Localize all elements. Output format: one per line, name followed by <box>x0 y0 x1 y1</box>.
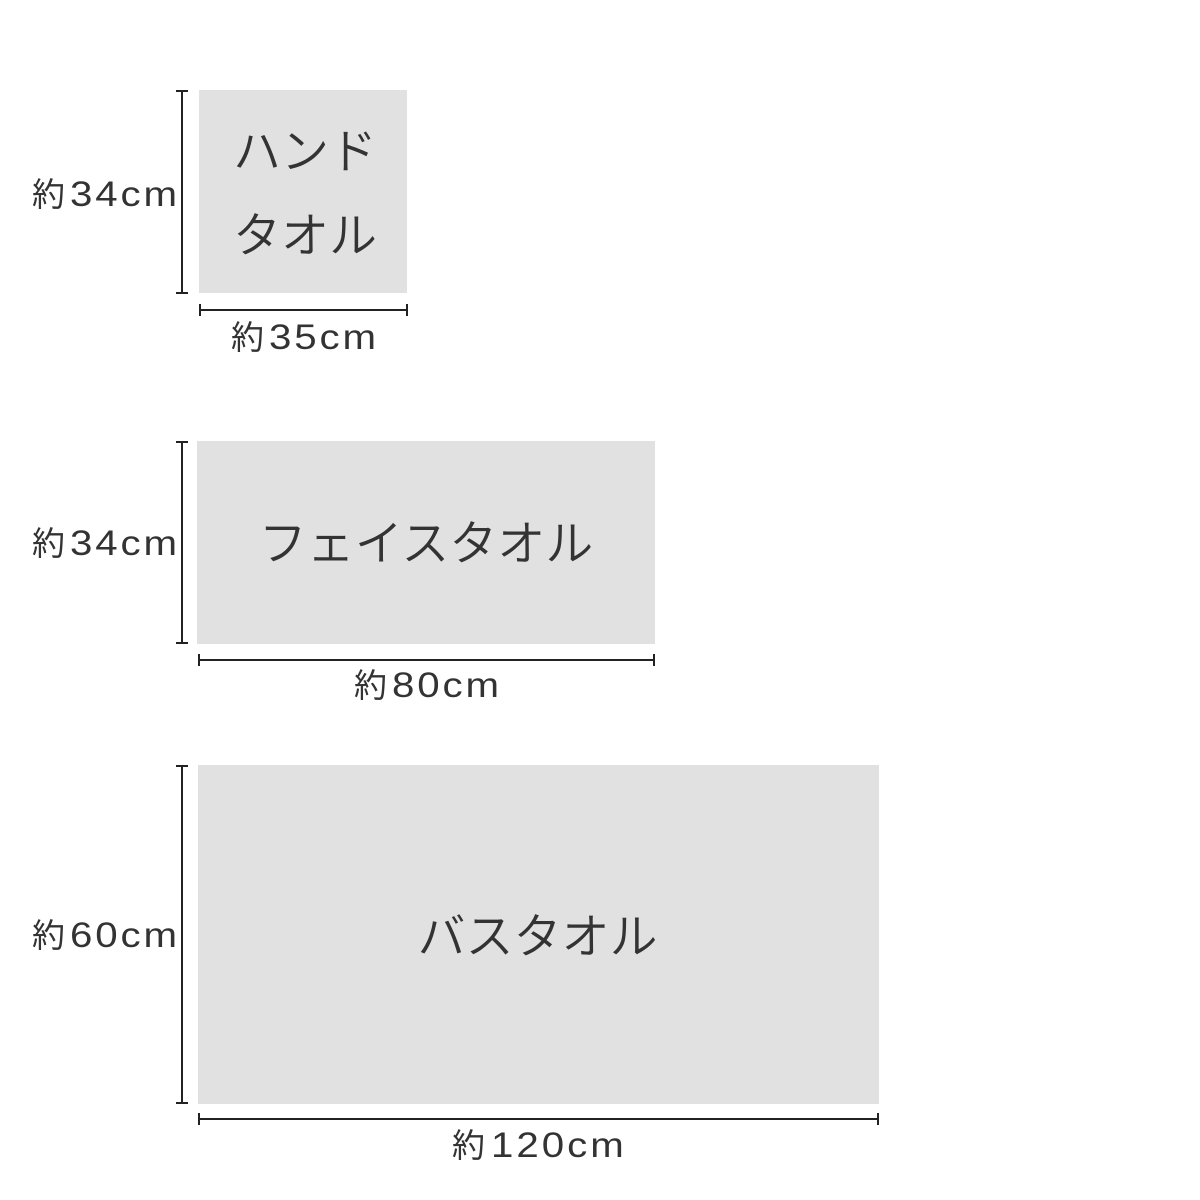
hand towel label: タオル <box>233 196 377 266</box>
hand towel height <box>32 168 179 216</box>
bath towel width: 約 <box>452 1119 485 1167</box>
hand towel height: 約 <box>32 168 65 216</box>
bath towel width <box>452 1119 627 1167</box>
hand towel height: 34cm <box>70 175 179 214</box>
hand towel width: 35cm <box>268 318 378 357</box>
panel: face towel <box>197 441 655 644</box>
face towel width <box>354 659 501 707</box>
face towel height <box>32 517 179 565</box>
hand towel label <box>233 112 377 266</box>
face towel height: 34cm <box>70 524 179 563</box>
bath towel label: バスタオル <box>417 897 658 967</box>
face towel label: フェイスタオル <box>259 504 593 574</box>
hand towel label: ハンド <box>233 112 377 182</box>
panel: hand towel <box>199 90 407 293</box>
hand towel width: 約 <box>231 311 264 359</box>
face towel width: 80cm <box>392 666 501 705</box>
face towel width: 約 <box>354 659 387 707</box>
hand towel width <box>231 311 378 359</box>
face towel height: 約 <box>32 517 65 565</box>
bath towel width: 120cm <box>491 1126 627 1165</box>
bath towel height: 60cm <box>70 916 179 955</box>
bath towel height <box>32 909 179 957</box>
bath towel height: 約 <box>32 909 65 957</box>
panel: bath towel <box>198 765 879 1104</box>
